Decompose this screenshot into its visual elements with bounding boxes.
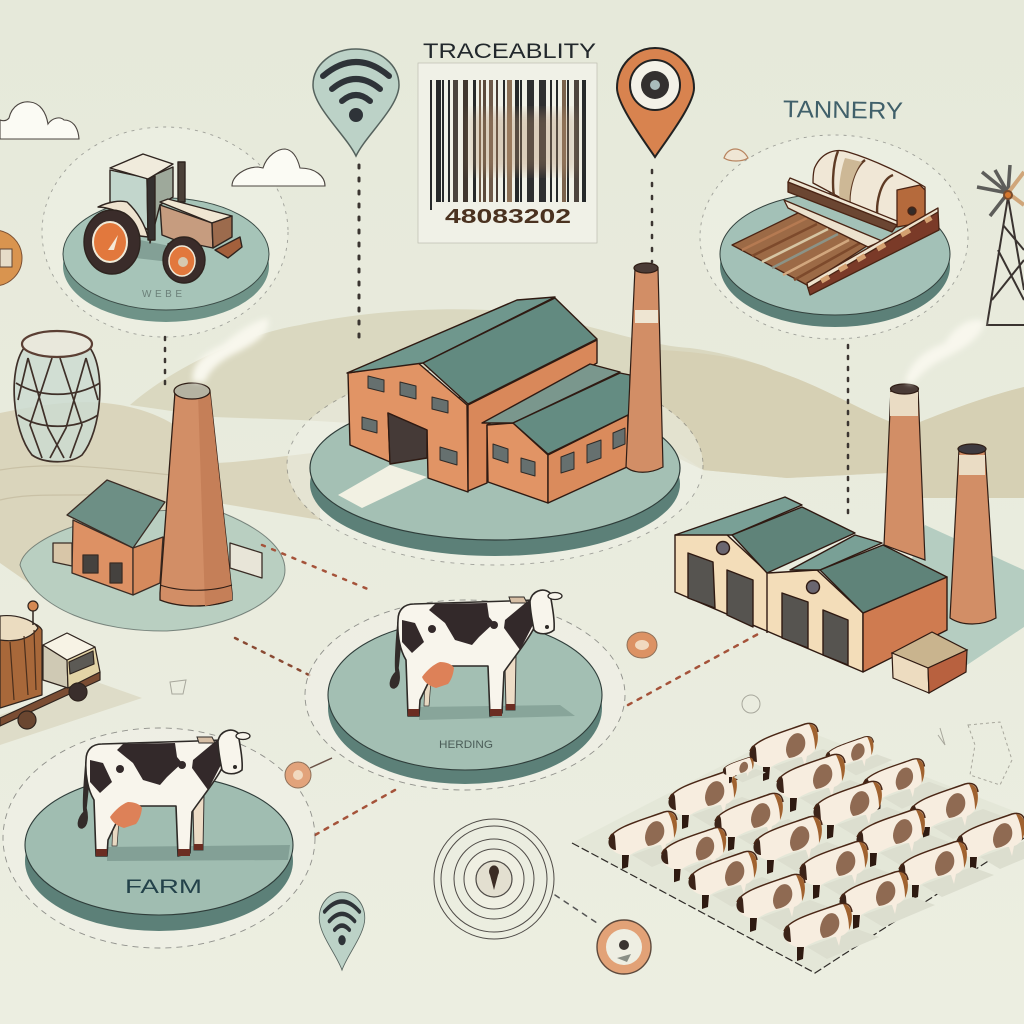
faint platform label: HERDING bbox=[439, 739, 493, 751]
tannery machine bbox=[732, 151, 939, 295]
chimney: right two bbox=[950, 444, 996, 624]
panel: middle cow platform bbox=[305, 590, 625, 790]
smoke: left chimney bbox=[193, 318, 268, 382]
chimney: right one bbox=[884, 384, 925, 560]
icon: cow bbox=[78, 730, 250, 856]
shadow: farm cow bbox=[107, 845, 290, 861]
shadow: middle cow bbox=[419, 705, 575, 720]
icon: windmill bbox=[977, 165, 1024, 325]
building: warehouse bbox=[675, 497, 947, 672]
panel: hides field bbox=[572, 723, 1024, 973]
hide row bbox=[608, 723, 1024, 961]
icon: orange badge bbox=[597, 920, 651, 974]
faint paper marks bbox=[170, 680, 1012, 785]
barcode blur tint bbox=[470, 112, 575, 172]
faint platform label: WEBE bbox=[142, 289, 182, 300]
icon: left edge tag bbox=[0, 230, 22, 286]
panel: tractor platform bbox=[42, 127, 288, 337]
icon: tractor bbox=[84, 154, 242, 283]
barcode number: 48083202 bbox=[445, 206, 571, 228]
building: main barn bbox=[347, 297, 630, 503]
connector lines bbox=[165, 165, 848, 925]
smoke: right chimney bbox=[905, 320, 985, 384]
text: tannery: TANNERY bbox=[783, 96, 903, 125]
icon: orange location pin bbox=[617, 48, 694, 157]
icon: concentric signal circles bbox=[434, 819, 554, 939]
barcode card bbox=[418, 40, 597, 243]
panel: main factory platform bbox=[287, 263, 703, 565]
panel: farm platform bbox=[3, 728, 315, 948]
background hills bbox=[0, 309, 1024, 593]
building: left house bbox=[53, 480, 262, 595]
clouds bbox=[0, 102, 325, 186]
panel: tannery platform bbox=[700, 96, 968, 339]
panel: right factory bbox=[675, 384, 1024, 693]
light path bbox=[338, 465, 427, 508]
icon: cow bbox=[390, 590, 562, 716]
barcode bars bbox=[430, 80, 586, 210]
chimney: left bbox=[160, 383, 232, 606]
panel: left chimney platform bbox=[20, 383, 285, 631]
text: farm: FARM bbox=[125, 877, 202, 898]
icon: wifi pin bottom bbox=[319, 892, 365, 970]
small orange markers bbox=[285, 632, 657, 788]
icon: wifi pin top bbox=[313, 49, 399, 156]
small shed bbox=[892, 632, 967, 693]
chimney: main bbox=[626, 263, 663, 472]
icon: delivery truck bbox=[0, 601, 142, 745]
icon: woven basket drum bbox=[14, 331, 100, 462]
heading: traceability: TRACEABLITY bbox=[423, 40, 596, 63]
icon: small mound bbox=[724, 149, 748, 161]
